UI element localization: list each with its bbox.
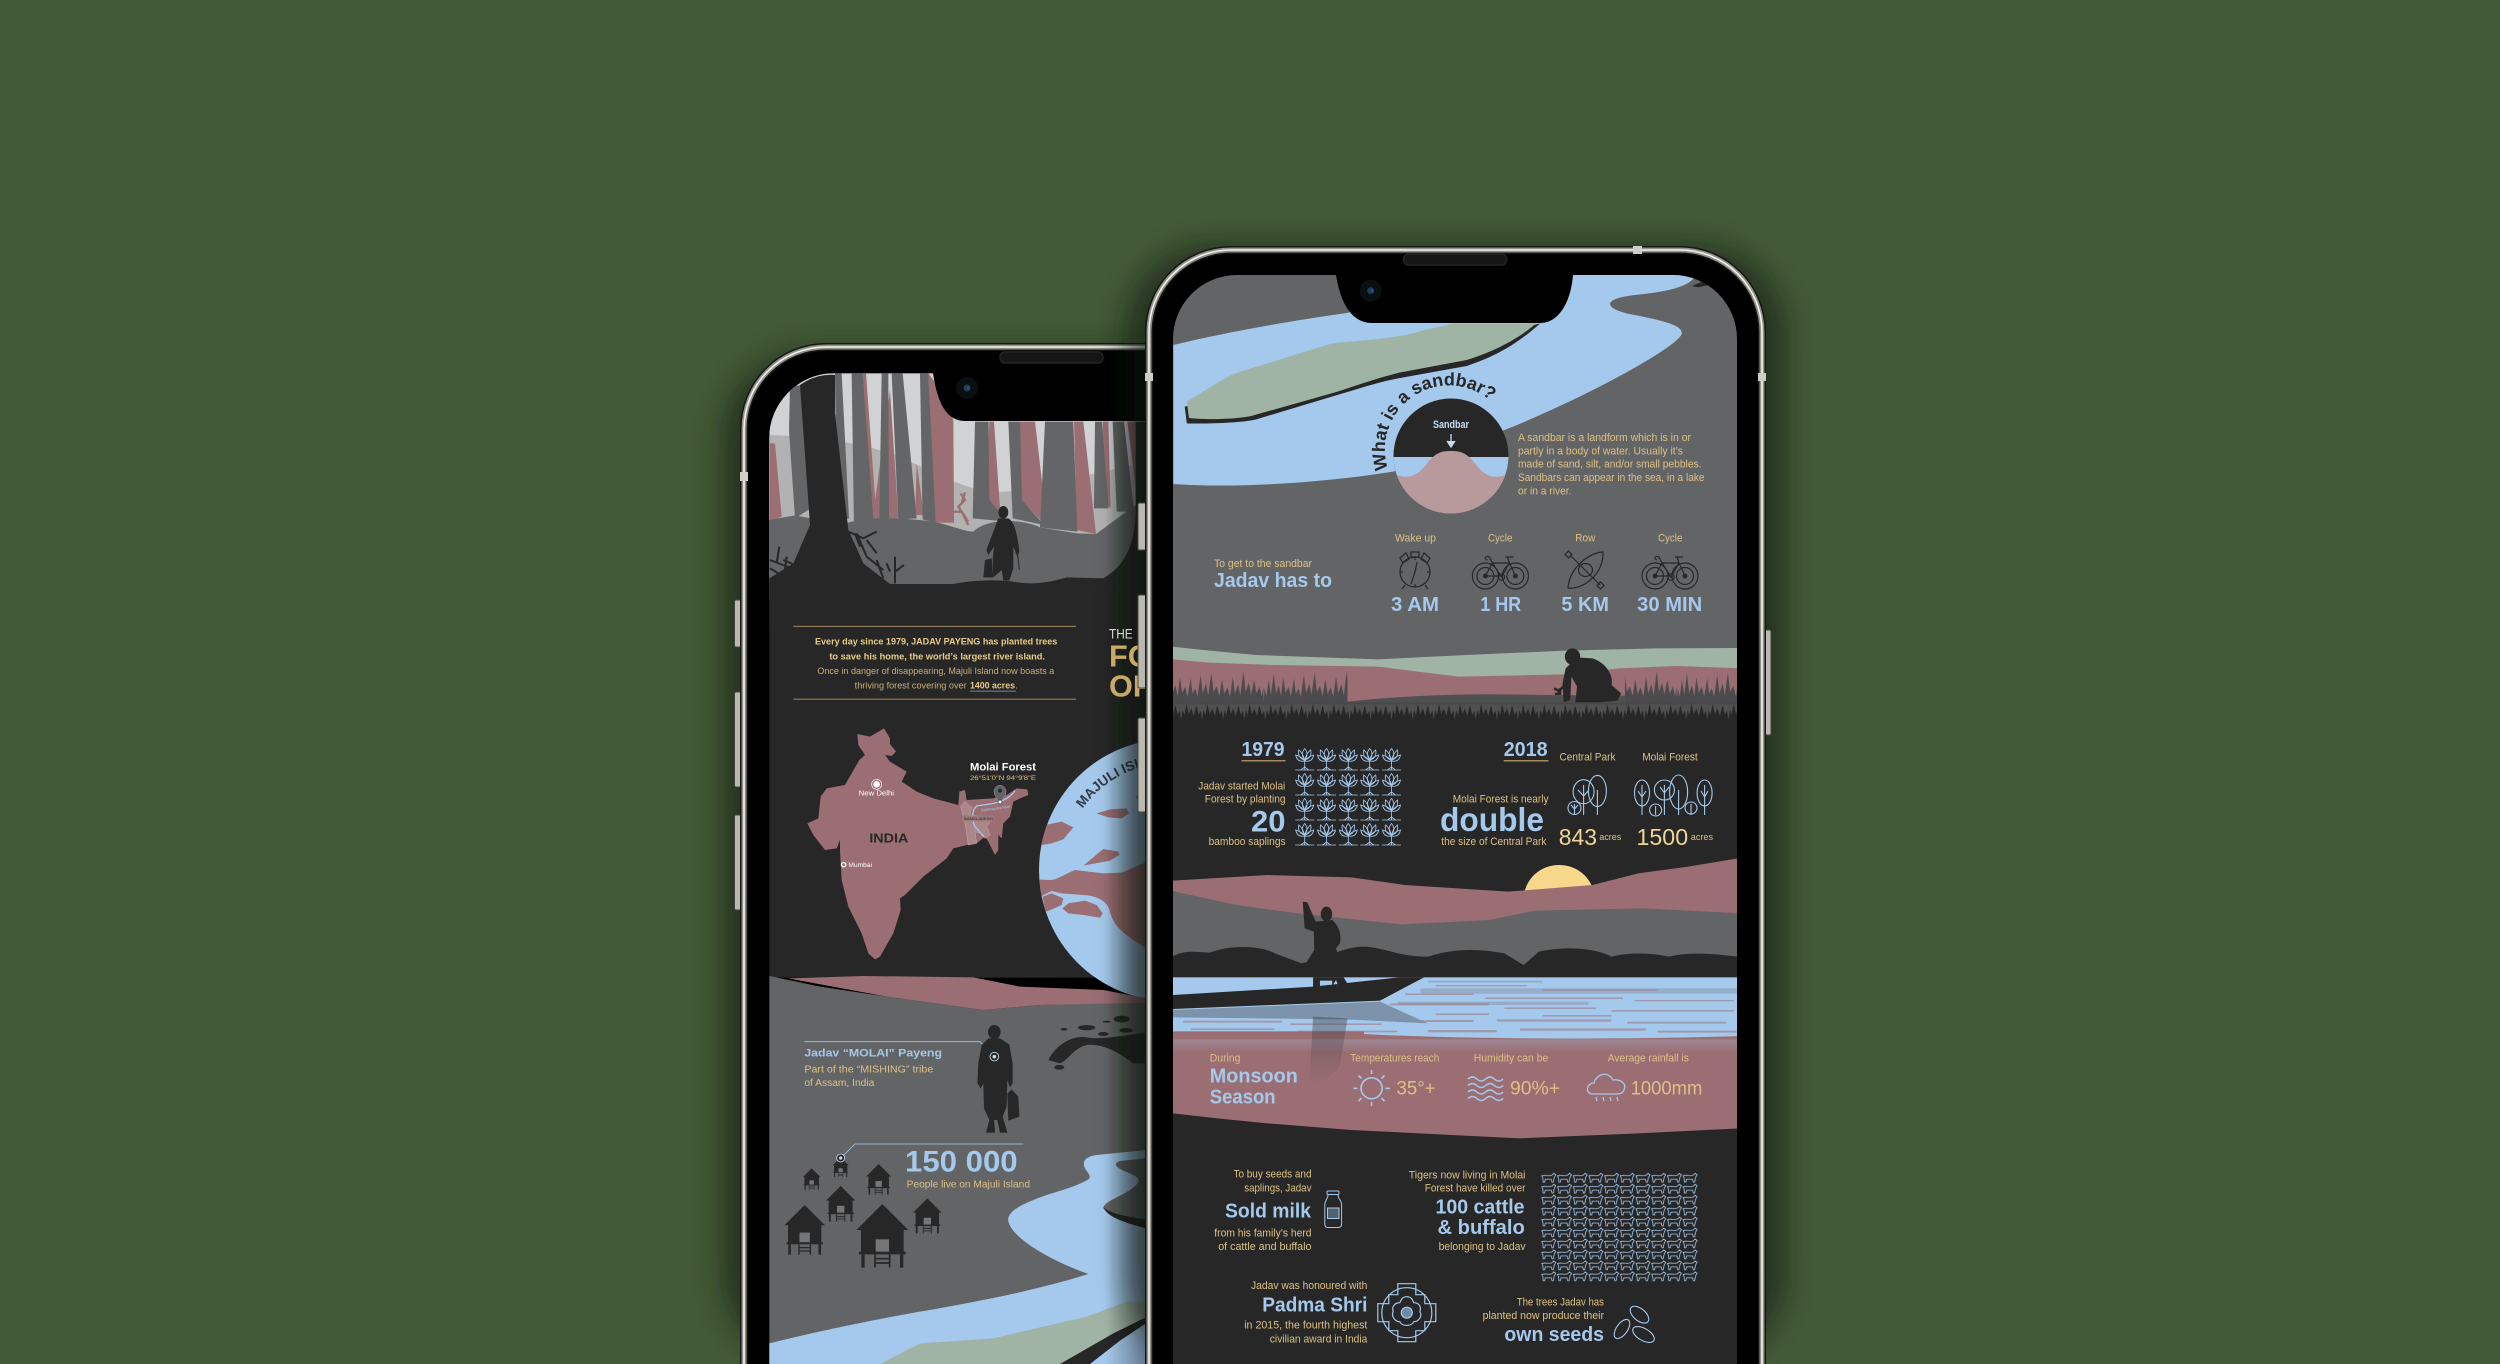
1979 block: bamboo saplings: [1209, 836, 1286, 848]
commute step: cycle again: 30 MIN: [1637, 594, 1702, 616]
title: [1109, 625, 1234, 704]
front phone: [1138, 246, 1772, 1364]
sold milk block: To buy seeds and: [1234, 1169, 1312, 1181]
icon: Padma Shri medal: [1378, 1284, 1436, 1342]
New Delhi marker: [859, 779, 894, 796]
Molai Forest comparison: 1500: [1636, 824, 1688, 850]
river and sandbar island illustration: [1173, 275, 1709, 486]
sandbar description: Sandbars can appear in the sea, in a lake: [1518, 472, 1704, 484]
kneeling Jadav planting: [1554, 648, 1621, 702]
temperature stat: Temperatures reach: [1350, 1053, 1439, 1065]
Jadav has to heading: Jadav has to: [1214, 570, 1332, 592]
intro text block: thriving forest covering over: [855, 681, 967, 691]
sandbar diagram: [1394, 398, 1508, 514]
commute step: cycle: [1472, 533, 1528, 616]
title: OF: [1109, 670, 1152, 704]
temperature stat: [1350, 1053, 1439, 1106]
commute step: cycle: 1 HR: [1480, 594, 1522, 616]
2018 block: double: [1440, 801, 1544, 838]
shade under front phone: [1109, 421, 1145, 1364]
2018 block: the size of Central Park: [1441, 836, 1547, 848]
tigers and cattle block: [1409, 1169, 1526, 1253]
rainfall stat: 1000mm: [1631, 1078, 1702, 1099]
own seeds block: planted now produce their: [1483, 1310, 1604, 1322]
monsoon heading: [1210, 1053, 1298, 1108]
2018 block: Molai Forest is nearly: [1453, 794, 1549, 806]
Central Park comparison: 843: [1559, 824, 1597, 850]
population callout: People live on Majuli Island: [907, 1180, 1030, 1191]
sold milk block: from his family’s herd: [1214, 1228, 1312, 1240]
commute step: wake up: [1391, 533, 1439, 616]
Mumbai marker: Mumbai: [848, 863, 872, 869]
tigers and cattle block: 100 cattle: [1436, 1196, 1524, 1218]
1979 block: Jadav started Molai: [1198, 780, 1285, 792]
front phone frame: [1145, 246, 1766, 1364]
huts village: [784, 1157, 942, 1268]
1979 block: Forest by planting: [1205, 794, 1286, 806]
Jadav has to heading: [1214, 559, 1332, 587]
Jadav callout: [804, 1042, 994, 1089]
own seeds block: The trees Jadav has: [1517, 1297, 1604, 1309]
bamboo saplings grid: [1295, 748, 1401, 845]
India label: INDIA: [869, 830, 909, 845]
intro text block: to save his home, the world’s largest river island.: [829, 651, 1045, 661]
Molai Forest label: 26°51′0″N 94°9′8″E: [970, 774, 1037, 782]
intro text block: Once in danger of disappearing, Majuli Island now boasts a: [817, 666, 1054, 676]
sold milk block: [1214, 1169, 1312, 1253]
humidity stat: Humidity can be: [1474, 1053, 1548, 1065]
dark middle section: [769, 584, 1146, 978]
monsoon heading: Monsoon: [1210, 1066, 1298, 1088]
humidity stat: [1468, 1053, 1560, 1100]
Majuli Island curved label: MAJULI ISLAND: [1076, 759, 1138, 808]
title: FOREST: [1109, 640, 1234, 674]
1979 block: 20: [1251, 806, 1286, 839]
front phone shadow: [1125, 245, 1785, 1364]
dark island: [1048, 1016, 1146, 1070]
forest illustration: [769, 373, 1145, 600]
planting landscape band: [1173, 647, 1743, 723]
cattle icon grid: [1541, 1172, 1698, 1282]
Central Park comparison: [1559, 752, 1621, 850]
Majuli Island circle: [1039, 743, 1145, 998]
back phone side buttons: [734, 600, 742, 910]
back phone screen: [769, 333, 1341, 1364]
commute step: cycle: Cycle: [1488, 533, 1512, 545]
Jadav callout: Jadav “MOLAI” Payeng: [804, 1048, 942, 1060]
1979 block: [1198, 739, 1286, 848]
Brahmaputra river and pin: BANGLADESH: [964, 816, 993, 821]
Brahmaputra river and pin: Brahmaputra River: [981, 804, 1011, 813]
commute step: wake up: Wake up: [1395, 533, 1436, 545]
Central Park comparison: acres: [1599, 832, 1621, 843]
New Delhi marker: New Delhi: [859, 788, 894, 797]
icon: seeds: [1611, 1303, 1657, 1346]
commute step: wake up: 3 AM: [1391, 594, 1439, 616]
Molai Forest label: Molai Forest: [970, 762, 1036, 774]
intro text block: 1400 acres: [970, 681, 1015, 691]
own seeds block: own seeds: [1504, 1324, 1604, 1346]
commute step: row: [1562, 534, 1608, 611]
icon: milk bottle: [1325, 1191, 1342, 1228]
commute step: row: Row: [1575, 533, 1595, 545]
person walking in forest: [983, 506, 1019, 581]
2018 block: 2018: [1504, 739, 1548, 761]
population callout: [837, 1144, 1030, 1191]
back phone: [734, 343, 1145, 1364]
population callout: 150 000: [905, 1146, 1018, 1179]
boatman silhouette: [1302, 902, 1342, 970]
commute step: cycle again: [1637, 533, 1702, 616]
monsoon heading: During: [1210, 1053, 1240, 1065]
sandbar diagram: Sandbar: [1433, 419, 1470, 431]
monsoon heading: Season: [1210, 1086, 1276, 1108]
Molai Forest comparison: Molai Forest: [1642, 752, 1698, 764]
2018 block: [1440, 739, 1549, 848]
front phone screen: [1173, 275, 1737, 1364]
commute step: cycle again: Cycle: [1658, 533, 1682, 545]
Brahmaputra river and pin: [962, 785, 1015, 837]
front phone side buttons: [1138, 503, 1771, 812]
temperature stat: 35°+: [1396, 1078, 1436, 1099]
Padma Shri block: in 2015, the fourth highest: [1244, 1319, 1367, 1331]
dark section background: [1173, 720, 1737, 1364]
map of India: [807, 728, 1037, 959]
sold milk block: Sold milk: [1225, 1200, 1312, 1222]
tigers and cattle block: Tigers now living in Molai: [1409, 1169, 1526, 1181]
Molai Forest comparison: acres: [1691, 832, 1713, 843]
Padma Shri block: Padma Shri: [1262, 1295, 1367, 1317]
tigers and cattle block: Forest have killed over: [1425, 1183, 1526, 1195]
curved heading: what is a sandbar: What is a sandbar?: [1372, 372, 1496, 472]
Molai Forest label: [970, 762, 1036, 780]
rainfall stat: [1587, 1053, 1702, 1101]
sold milk block: saplings, Jadav: [1244, 1183, 1312, 1195]
Jadav marker: [990, 1052, 999, 1061]
Jadav silhouette: [977, 1025, 1019, 1133]
title: THE: [1109, 625, 1133, 641]
Mumbai marker: [841, 862, 872, 869]
tigers and cattle block: belonging to Jadav: [1439, 1241, 1526, 1253]
Padma Shri block: Jadav was honoured with: [1251, 1280, 1367, 1292]
intro text block: .: [1015, 681, 1018, 691]
sandbar description: [1518, 432, 1704, 497]
tigers and cattle block: & buffalo: [1438, 1217, 1525, 1239]
front phone notch: [1336, 254, 1573, 323]
Jadav has to heading: To get to the sandbar: [1214, 558, 1312, 570]
Padma Shri block: civilian award in India: [1270, 1333, 1368, 1345]
water with boat: [1173, 977, 1743, 1167]
Jadav callout: Part of the “MISHING” tribe: [804, 1065, 934, 1076]
1979 block: 1979: [1242, 739, 1284, 761]
lower landscape band: [769, 976, 1146, 1364]
Jadav callout: of Assam, India: [804, 1078, 875, 1089]
commute step: row: 5 KM: [1561, 594, 1609, 616]
back phone shadow: [722, 350, 1202, 1364]
water ripples: [1183, 981, 1742, 1033]
back phone notch: [930, 352, 1160, 421]
Padma Shri block: [1244, 1280, 1368, 1345]
Central Park comparison: Central Park: [1560, 752, 1616, 764]
intro text block: [793, 626, 1076, 700]
back phone frame: [740, 347, 1200, 1364]
sold milk block: of cattle and buffalo: [1218, 1241, 1312, 1253]
sandbar description: made of sand, silt, and/or small pebbles.: [1518, 459, 1702, 471]
sandbar description: or in a river.: [1518, 485, 1572, 497]
own seeds block: [1483, 1297, 1604, 1346]
intro text block: Every day since 1979, JADAV PAYENG has planted trees: [815, 637, 1057, 647]
humidity stat: 90%+: [1510, 1078, 1560, 1099]
sunset landscape: [1173, 858, 1742, 978]
river: [769, 1150, 1146, 1364]
sandbar description: partly in a body of water. Usually it’s: [1518, 445, 1683, 457]
sandbar description: A sandbar is a landform which is in or: [1518, 432, 1691, 444]
rainfall stat: Average rainfall is: [1608, 1053, 1689, 1065]
Molai Forest comparison: [1634, 752, 1713, 850]
